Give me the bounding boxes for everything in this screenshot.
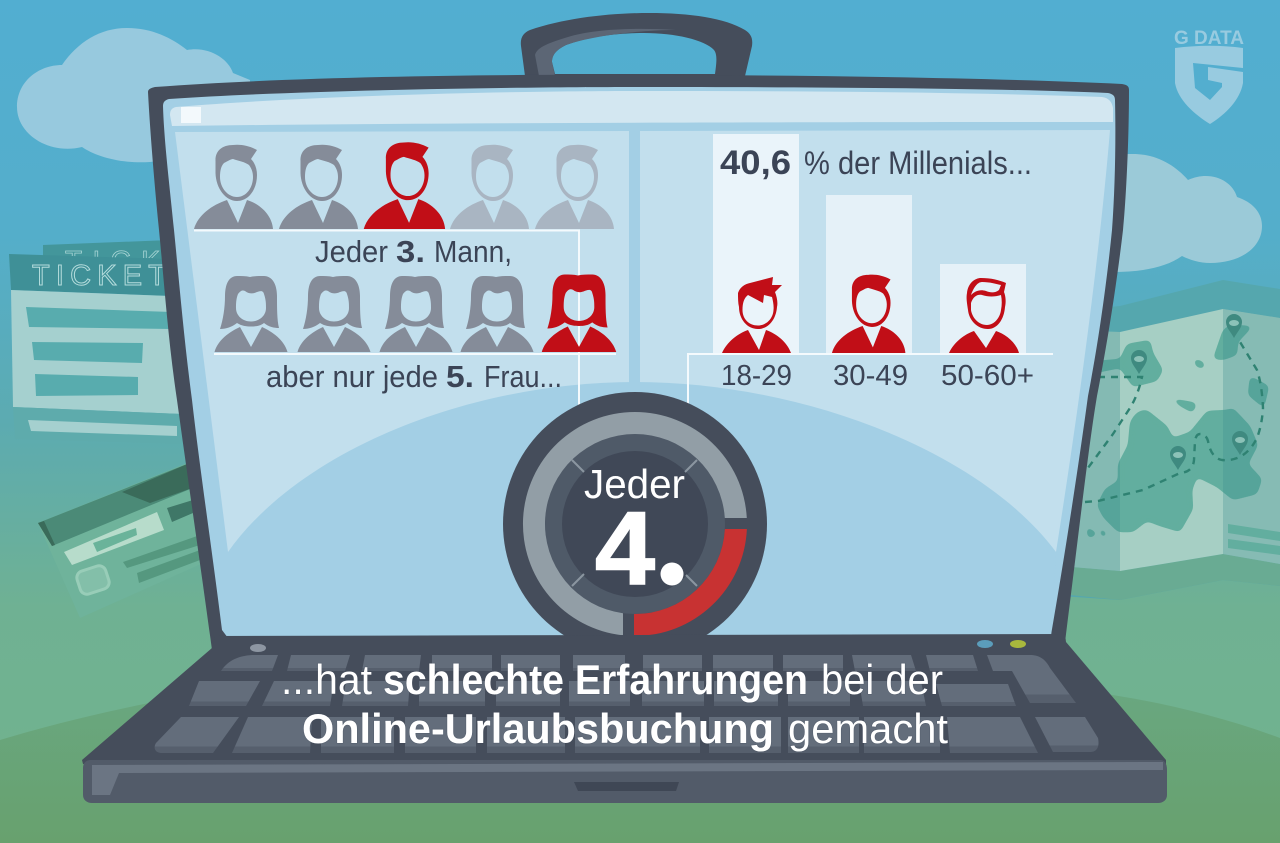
person: 50-60+ [949,278,1019,353]
ticket label: TICKET [32,260,166,292]
headline: bei der [821,656,943,703]
illustration: front ticket [9,254,186,444]
headline [281,656,948,752]
panel: men and women [175,130,1110,552]
window button [181,107,201,123]
text: aber nur jede 5. Frau: Frau... [484,359,562,394]
gauge: red share [634,529,747,636]
age labels: 30-49 [833,360,908,392]
laptop screen [163,87,1115,638]
indicator lights [250,640,1026,652]
person: 18-29 [722,277,791,353]
browser title bar [170,91,1113,126]
gauge: gray share [523,412,747,635]
text: 40,6 % der Millenials: % der Millenials... [804,145,1032,181]
text: Jeder 3. Mann: Mann, [434,234,512,269]
illustration: back ticket [43,240,162,259]
text: 4. [595,491,684,607]
screen dome [228,382,1056,638]
keyboard keys [155,655,1099,753]
text: Jeder 3. Mann [315,234,512,269]
text: Jeder: Jeder [584,461,685,507]
age labels: 50-60+ [941,360,1034,392]
laptop keyboard deck [82,634,1166,764]
laptop handle [521,13,752,76]
notch [574,782,679,791]
text: Jeder 3. Mann: Jeder [315,234,388,269]
laptop base [83,760,1167,803]
person: 30-49 [832,275,905,353]
age labels: 18-29 [721,360,792,392]
donut gauge: jeder 4. [503,392,767,656]
logo: G DATA: G DATA [1174,28,1244,49]
icons: women row [214,274,616,352]
text: 4.: 4 [595,491,655,607]
age labels [721,360,1034,392]
chart lines [194,230,1053,405]
illustration: credit card [38,460,210,618]
cloud: right [1100,154,1262,272]
laptop lid [148,75,1129,650]
cloud: left [17,28,250,162]
illustration: folded map [1060,280,1280,600]
text: 40,6 % der Millenials: 40,6 [720,144,791,182]
text: 40,6 % der Millenials [720,144,1032,182]
icons: men row [194,142,614,229]
map route [1085,342,1263,502]
map pins [1131,314,1248,470]
headline: schlechte Erfahrungen [383,656,808,703]
text: aber nur jede 5. Frau: 5. [446,359,474,394]
headline: Online-Urlaubsbuchung [302,705,774,752]
illustration: back ticket: TICK [65,245,160,276]
text: aber nur jede 5. Frau: aber nur jede [266,359,438,394]
headline: gemacht [788,705,948,752]
logo: G DATA [1174,28,1244,124]
map land [1085,325,1269,539]
bar chart: age groups [713,134,1026,353]
text: Jeder 3. Mann: 3. [396,234,425,269]
panel: age groups [640,130,1110,552]
headline: ...hat [281,656,372,703]
text: aber nur jede 5. Frau [266,359,562,394]
